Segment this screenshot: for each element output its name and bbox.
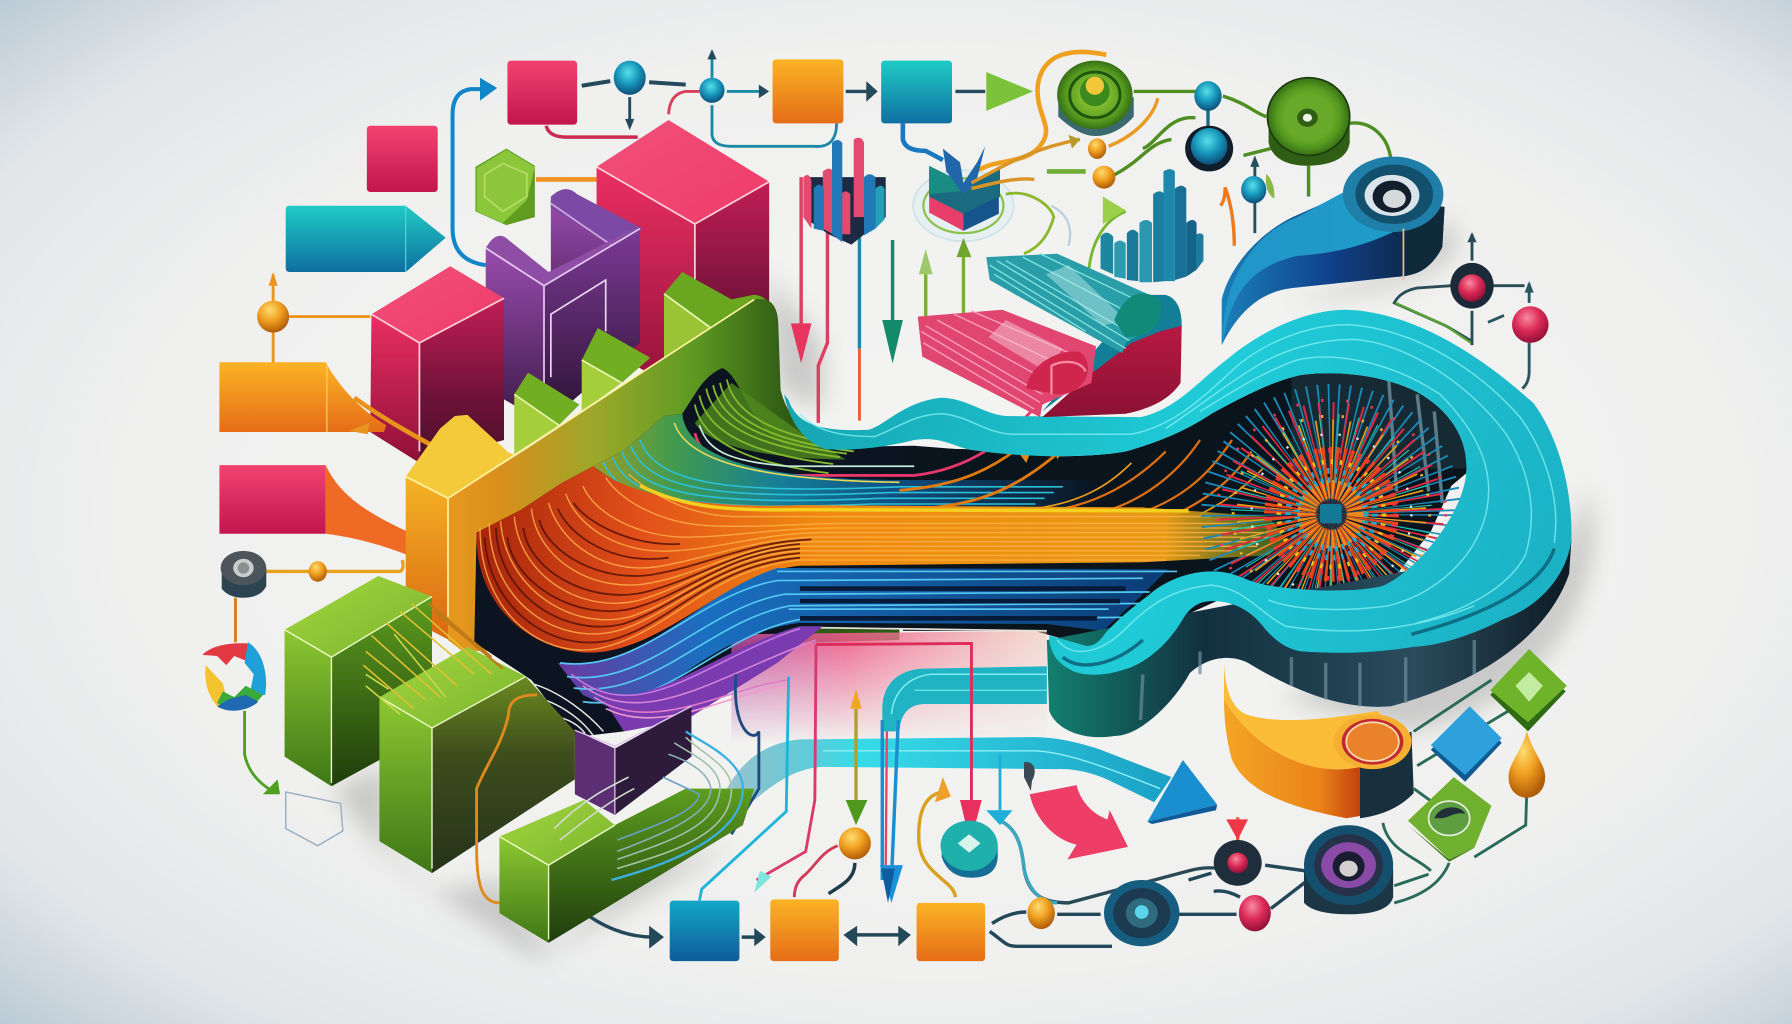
3D block: purple back (551, 189, 642, 343)
arrow: green curved (245, 711, 280, 794)
node: blue small with arrow and leaf (1221, 155, 1274, 246)
purple cylinder (1304, 825, 1393, 914)
wire: orange loop between blocks (477, 695, 537, 903)
teal ramp top (1042, 295, 1182, 411)
node: orange balls (1047, 98, 1171, 189)
node: dark blue ball (1143, 118, 1233, 171)
3D block: green front (499, 789, 754, 943)
pale edge under the stream (800, 627, 1047, 631)
box: orange with flared tail (219, 362, 457, 459)
green comb: tabs on the ridge (514, 272, 773, 455)
node links green (1134, 91, 1391, 160)
tab 2 (582, 328, 650, 411)
orange squiggle to box (919, 777, 955, 897)
node: orange ball and links (794, 827, 871, 897)
ribbon highlight rings (800, 325, 1556, 651)
yellow top wires of the stream (640, 486, 1189, 511)
yellow block top (406, 415, 514, 498)
box: blue bottom (670, 901, 739, 961)
pink and white wire over the band (695, 409, 1033, 475)
fine wires from green blocks (363, 603, 503, 714)
node: orange ball left (257, 272, 370, 363)
stream: blue fill (558, 568, 1168, 714)
icon: small box with halo (913, 135, 1080, 254)
panel: central wire bundle face (406, 299, 1486, 743)
3D block: large pink (597, 120, 769, 400)
orange squiggle (969, 52, 1106, 197)
connector: orange line from washer (265, 560, 403, 571)
node: teal ball (1194, 81, 1222, 128)
dark drop marker (1024, 762, 1035, 791)
box: orange bottom middle (770, 899, 839, 961)
links to right diamonds (1383, 680, 1527, 903)
ribbon lower gloss (1063, 549, 1554, 665)
blue diamond (1431, 706, 1502, 782)
wire arrows: pink long (754, 643, 982, 893)
box: pink left (367, 126, 438, 192)
connector: blue curved arrow (453, 78, 497, 265)
connector: pink link (546, 126, 638, 137)
node: pink ball top right (1488, 281, 1549, 389)
tab 3 (664, 272, 773, 359)
icon: colour ring (202, 642, 266, 711)
3D block: green middle (379, 647, 575, 873)
soft shadows under shapes (331, 217, 1593, 960)
arrow box: teal pentagon (286, 206, 446, 272)
blue wire lines (560, 571, 1177, 703)
green disc (1057, 61, 1134, 136)
stream: orange fill (477, 466, 1286, 653)
box: teal top (881, 61, 952, 123)
3D block: small pink (370, 266, 504, 463)
panel: bottom row nodes (590, 817, 1393, 961)
box: pink top (507, 61, 577, 125)
3D block: small purple (575, 706, 691, 815)
double arrow: orange to green (846, 689, 867, 825)
box: orange bottom right (917, 903, 985, 961)
3D block: green left (285, 576, 432, 786)
yellow swoosh with cylinder (1224, 663, 1414, 818)
stream: teal fill (593, 414, 1097, 513)
teal striped block (986, 254, 1161, 353)
wires: blue double arrow down (880, 720, 903, 903)
wide cyan arrow with blue head (727, 737, 1217, 824)
green triangle (955, 72, 1033, 111)
green diamond top (1490, 649, 1567, 731)
navy gaps between blue wires (800, 589, 1126, 618)
block face gradient (448, 299, 899, 651)
arrow into blue box (590, 917, 664, 949)
dark wire gaps (485, 503, 811, 643)
icon: dark washer (221, 551, 266, 642)
node: small orange ball on line (309, 561, 327, 582)
ribbon top surface (784, 310, 1572, 675)
green tile with ring (1408, 777, 1491, 862)
stream: green wires (695, 379, 861, 473)
pink curved arrow (1030, 785, 1128, 859)
node: orange ball small (1027, 897, 1055, 929)
bar chart: pink and blue spikes (791, 138, 903, 423)
node: pink ball (1239, 895, 1271, 931)
block front edge (406, 477, 466, 649)
panel: pink and teal ramps (918, 254, 1182, 417)
green gem (475, 149, 597, 225)
lower cyan band (882, 666, 1047, 731)
green cylinder (1267, 78, 1350, 197)
stream: purple wires (571, 626, 823, 731)
panel: cyan ribbon (784, 310, 1572, 737)
connector: blue under teal box (903, 123, 943, 160)
hole dark interior (902, 373, 1466, 638)
silver wires above the small block (531, 683, 603, 737)
links from box (990, 912, 1237, 946)
node: dark with pink core and link (1394, 232, 1525, 345)
node: dark with pink core (1189, 817, 1305, 909)
ribbon dark side wall (1047, 539, 1571, 737)
blue swoosh with roll (1222, 157, 1445, 345)
wire: blue thread in purple block (731, 674, 759, 834)
node: dark ring (1104, 880, 1179, 946)
wire: teal and green long to nodes (986, 754, 1218, 903)
sketch: faint hexagon outline (286, 792, 343, 846)
burst core chip (1320, 504, 1342, 523)
pink haze below the stream (731, 631, 1047, 743)
wire: cyan to blue box (699, 677, 789, 901)
3D block: purple front (486, 226, 640, 425)
bar chart: teal spikes (1089, 169, 1203, 291)
teal wire lines (603, 423, 1063, 511)
orange arrows rising above the stream (899, 440, 1263, 517)
orange drop (1509, 731, 1545, 798)
node: blue hub with arrows (669, 49, 837, 146)
arrow (846, 81, 878, 102)
box: orange top (773, 59, 843, 123)
orange wire nest (480, 474, 1269, 650)
arrows: green up pair (919, 238, 971, 337)
node: teal disc (941, 821, 998, 878)
tab 1 (514, 373, 579, 455)
node: blue ball with links (582, 61, 686, 130)
dark interior behind wires (474, 368, 1257, 737)
panel: top row flow nodes (367, 49, 1391, 265)
double arrow (843, 926, 911, 946)
cable bundle: grey-blue from purple block (554, 731, 743, 880)
wall streaks (1141, 640, 1474, 720)
pink striped block (918, 310, 1096, 417)
arrow (742, 928, 766, 946)
box: pink with flared tail (219, 465, 419, 560)
crimson ramp side (1042, 303, 1182, 417)
radial burst of coloured wires (1217, 400, 1446, 629)
